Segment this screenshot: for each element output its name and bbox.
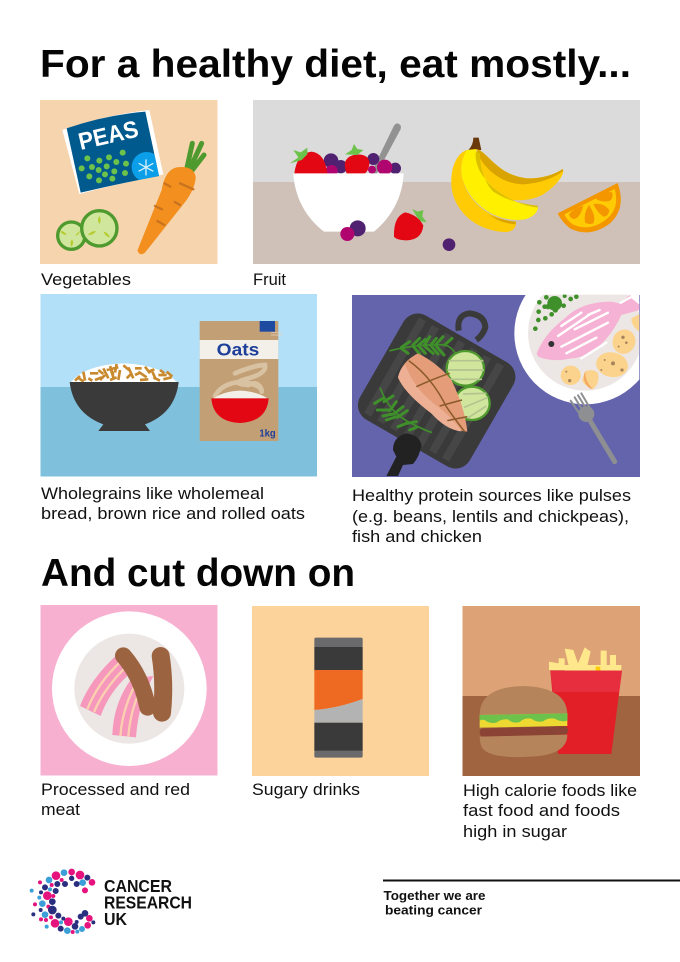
icon: bacon rashers	[80, 657, 153, 737]
icon: bananas	[451, 138, 563, 232]
logo wordmark: CANCER	[104, 876, 172, 896]
panel: vegetables	[40, 100, 218, 264]
panel: healthy protein	[352, 294, 640, 477]
label: fruit: Fruit	[253, 271, 286, 289]
label: healthy protein: fish and chicken	[352, 528, 482, 546]
panel: high calorie foods	[462, 606, 640, 776]
label: healthy protein: Healthy protein sources like pulses	[352, 487, 631, 505]
icon: logo dots	[30, 869, 95, 934]
icon: box of oats: Oats	[217, 339, 259, 359]
label: processed and red meat	[41, 781, 190, 819]
logo: Cancer Research UK	[30, 869, 192, 934]
label: high calorie foods: high in sugar	[463, 823, 568, 841]
label: wholegrains: bread, brown rice and rolled oats	[41, 505, 305, 523]
icon: bowl of berries	[290, 123, 404, 241]
icon: fork	[571, 393, 615, 462]
label: high calorie foods: High calorie foods like	[463, 782, 637, 800]
icon: fries	[549, 647, 622, 671]
icon: box of oats	[200, 321, 282, 441]
label: wholegrains: Wholegrains like wholemeal	[41, 485, 264, 503]
icon: orange slice	[558, 183, 621, 232]
icon: bag of peas	[62, 110, 163, 194]
icon: bowl of brown rice	[70, 363, 179, 431]
label: vegetables: Vegetables	[41, 271, 131, 289]
label: healthy protein	[352, 487, 631, 546]
tagline: beating cancer	[385, 902, 482, 918]
label: high calorie foods	[463, 782, 637, 841]
logo wordmark: RESEARCH	[104, 892, 192, 912]
tagline: Together we are	[384, 888, 486, 903]
icon: bag of peas: PEAS	[76, 116, 141, 156]
logo wordmark	[104, 876, 192, 929]
icon: plate of fish and potatoes	[514, 294, 640, 404]
icon: red fries box	[550, 671, 622, 754]
tagline	[383, 880, 680, 918]
icon: blueberry	[443, 238, 455, 251]
label: processed and red meat: Processed and red	[41, 781, 190, 799]
icon: rosemary	[375, 337, 455, 432]
icon: chicken breast	[398, 353, 467, 432]
label: high calorie foods: fast food and foods	[463, 802, 620, 820]
icon: drink can	[314, 638, 363, 758]
label: processed and red meat: meat	[41, 801, 80, 819]
label: wholegrains	[41, 485, 305, 523]
panel: fruit	[253, 100, 640, 264]
icon: cucumber slices	[447, 351, 490, 420]
title: For a healthy diet, eat mostly...	[40, 43, 631, 86]
icon: strawberry	[394, 209, 427, 240]
icon: carrot	[137, 143, 204, 254]
label: sugary drinks: Sugary drinks	[252, 781, 360, 799]
panel: wholegrains	[40, 294, 317, 476]
panel: sugary drinks	[252, 606, 429, 776]
icon: box of oats: 1kg	[259, 429, 276, 440]
label: healthy protein: (e.g. beans, lentils and chickpeas),	[352, 508, 629, 526]
icon: griddle pan	[352, 307, 522, 476]
icon: burger	[480, 686, 568, 757]
panel: processed and red meat	[40, 605, 218, 776]
icon: plate	[52, 611, 207, 766]
logo wordmark: UK	[104, 909, 127, 929]
heading: cut down: And cut down on	[41, 552, 355, 595]
icon: cucumber slices	[58, 211, 117, 249]
icon: sausages	[123, 656, 163, 713]
